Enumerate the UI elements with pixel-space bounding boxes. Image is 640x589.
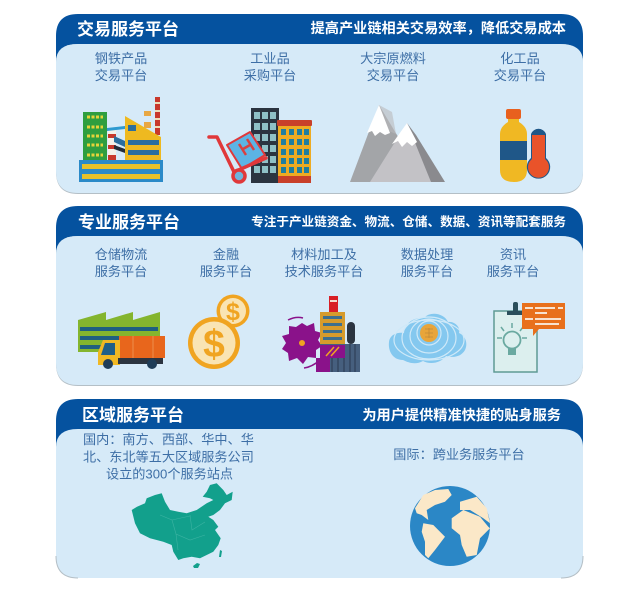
icon: coins [188, 294, 250, 369]
label: data: 数据处理 [401, 247, 453, 262]
label: steel: 交易平台 [95, 67, 147, 83]
text: international: 国际：跨业务服务平台 [393, 447, 525, 462]
label: processing: 技术服务平台 [285, 264, 363, 279]
label: raw materials: 交易平台 [367, 67, 419, 83]
icon: globe [410, 486, 490, 566]
label: chemicals: 化工品 [500, 51, 540, 66]
label: steel: 钢铁产品 [95, 51, 147, 66]
label: chemicals: 交易平台 [494, 67, 546, 83]
subtitle: trading services: 提高产业链相关交易效率，降低交易成本 [311, 20, 566, 37]
icon: saw and plant [282, 296, 360, 372]
icon: steel factory [79, 97, 163, 182]
panel: professional services [56, 206, 583, 386]
text: domestic: 国内：南方、西部、华中、华 [83, 432, 254, 447]
label: industrial goods: 采购平台 [244, 68, 296, 83]
icon: warehouse and truck [78, 312, 165, 369]
icon: cart and buildings [209, 108, 312, 183]
icon: clipboard with idea [494, 302, 565, 372]
panel: trading services [56, 14, 583, 194]
heading: trading services: 交易服务平台 [77, 19, 179, 39]
label: logistics: 服务平台 [95, 264, 147, 279]
label: processing: 材料加工及 [291, 247, 357, 262]
text: domestic: 北、东北等五大区域服务公司 [83, 448, 254, 464]
icon: coins: $ [203, 323, 225, 366]
map: China [132, 483, 233, 568]
icon: coins: $ [226, 298, 240, 326]
label: information: 资讯 [500, 247, 526, 262]
icon: mountains [350, 105, 445, 182]
label: industrial goods: 工业品 [250, 51, 290, 66]
label: logistics: 仓储物流 [95, 247, 147, 262]
text: domestic: 设立的300个服务站点 [106, 467, 233, 482]
label: raw materials: 大宗原燃料 [360, 50, 426, 66]
label: finance: 服务平台 [200, 264, 252, 279]
heading: regional services: 区域服务平台 [82, 405, 184, 425]
label: finance: 金融 [213, 247, 239, 262]
subtitle: regional services: 为用户提供精准快捷的贴身服务 [362, 407, 561, 424]
heading: professional services: 专业服务平台 [78, 212, 180, 232]
icon: bottle and thermometer [500, 109, 550, 182]
panel: regional services [56, 399, 583, 578]
subtitle: professional services: 专注于产业链资金、物流、仓储、数据、资讯等配套服务 [251, 214, 566, 229]
icon: data cloud [389, 314, 466, 363]
label: information: 服务平台 [487, 264, 539, 279]
label: data: 服务平台 [401, 264, 453, 279]
